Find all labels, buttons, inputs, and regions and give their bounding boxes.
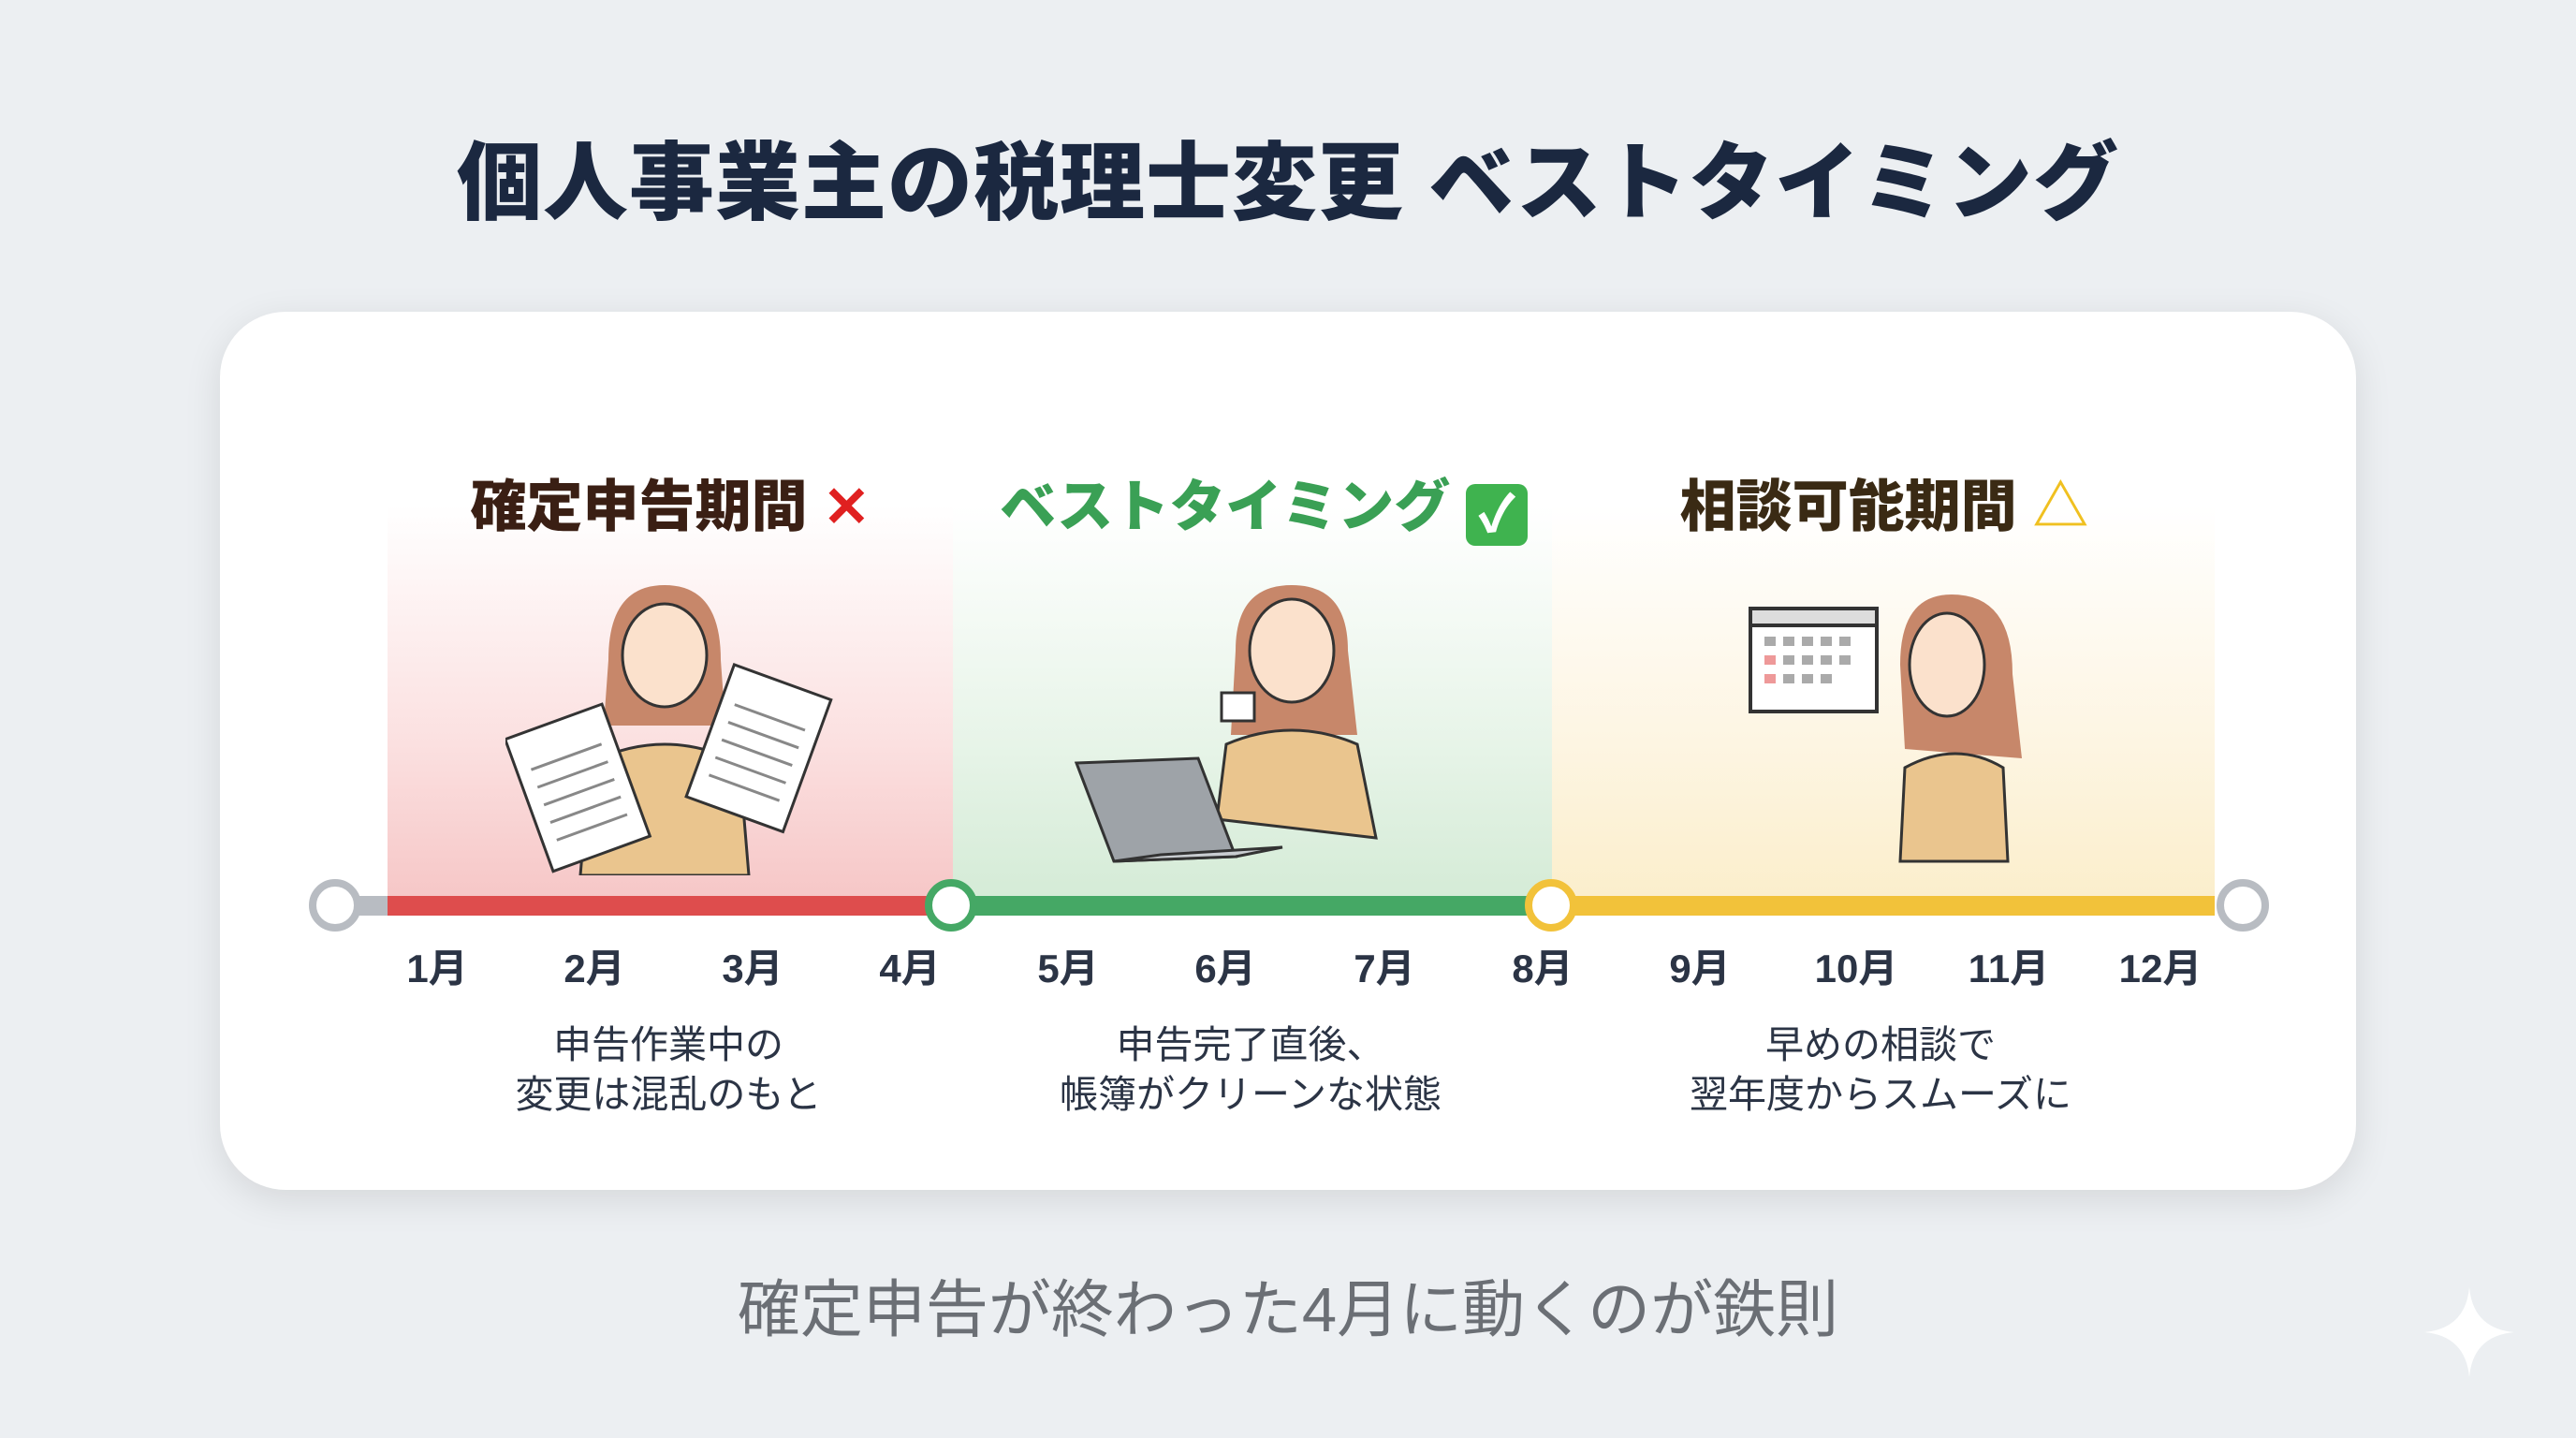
panel: timeline card xyxy=(220,312,2356,1190)
timeline bar xyxy=(359,896,2215,916)
heading: best timing: ベストタイミング xyxy=(1000,476,1450,538)
text: 10月 xyxy=(1815,946,1897,990)
text: 9月 xyxy=(1669,946,1731,990)
month labels xyxy=(406,946,2202,990)
zone: green xyxy=(953,506,1552,903)
text: 6月 xyxy=(1194,946,1256,990)
illustration: woman with coffee and laptop xyxy=(1075,585,1378,863)
icon: sparkle xyxy=(2426,1288,2512,1375)
description: red: 申告作業中の xyxy=(553,1023,783,1066)
text: 2月 xyxy=(564,946,625,990)
zone: yellow xyxy=(1552,506,2215,903)
illustration: stressed woman with papers xyxy=(505,585,833,875)
timeline markers xyxy=(309,879,361,932)
heading: consultation period: 相談可能期間 △ xyxy=(1680,476,2088,538)
zone: red xyxy=(388,506,953,903)
text: 11月 xyxy=(1969,946,2049,990)
heading: best timing: ✓ xyxy=(1478,487,1515,543)
text: 1月 xyxy=(406,946,468,990)
heading: filing period: 確定申告期間 ✕ xyxy=(471,476,870,538)
text: 5月 xyxy=(1037,946,1099,990)
text: 3月 xyxy=(722,946,783,990)
text: 12月 xyxy=(2119,946,2202,990)
description: green xyxy=(1060,1023,1442,1116)
illustration: woman pointing at calendar xyxy=(1749,594,2022,863)
description: yellow xyxy=(1690,1023,2071,1116)
text: 4月 xyxy=(879,946,941,990)
description: red xyxy=(515,1023,822,1116)
title: 個人事業主の税理士変更 ベストタイミング xyxy=(457,137,2119,231)
text: 7月 xyxy=(1354,946,1415,990)
description: green: 申告完了直後、 xyxy=(1116,1023,1385,1066)
footer text: 確定申告が終わった4月に動くのが鉄則 xyxy=(738,1275,1838,1345)
description: yellow: 翌年度からスムーズに xyxy=(1690,1073,2071,1116)
description: green: 帳簿がクリーンな状態 xyxy=(1060,1073,1442,1116)
text: 8月 xyxy=(1512,946,1573,990)
description: yellow: 早めの相談で xyxy=(1765,1023,1996,1066)
description: red: 変更は混乱のもと xyxy=(515,1073,822,1116)
